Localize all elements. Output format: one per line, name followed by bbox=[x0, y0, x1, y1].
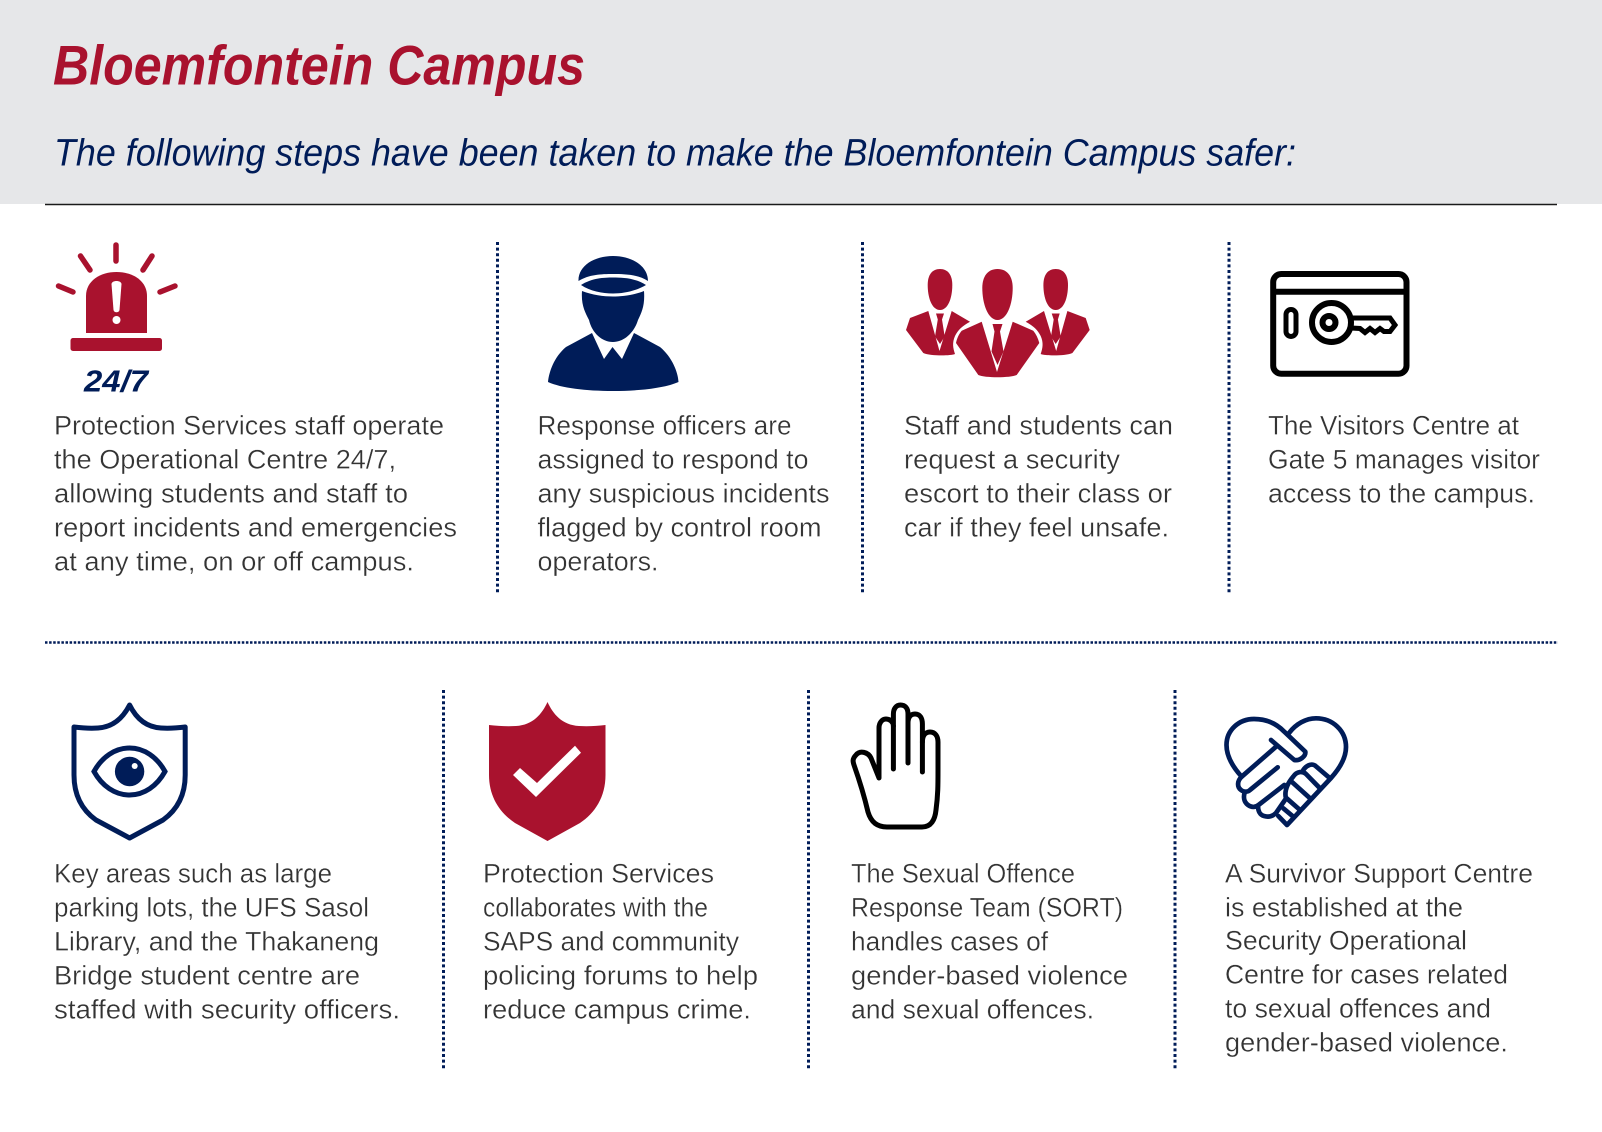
text block: visitors centre bbox=[1268, 410, 1540, 508]
text block: security escort: request a security bbox=[904, 444, 1120, 474]
text block: key areas: Key areas such as large bbox=[54, 858, 332, 888]
text block: visitors centre: access to the campus. bbox=[1268, 478, 1535, 508]
text block: SORT bbox=[851, 858, 1128, 1024]
icon: response officer bbox=[548, 256, 678, 391]
text block: response officers: assigned to respond to bbox=[538, 444, 808, 474]
text block: response officers: any suspicious incidents bbox=[538, 478, 830, 508]
text block: SORT: Response Team (SORT) bbox=[851, 892, 1123, 922]
text block: visitors centre: Gate 5 manages visitor bbox=[1268, 444, 1540, 474]
text block: SAPS collaboration: collaborates with the bbox=[483, 892, 708, 922]
text block: SORT: gender-based violence bbox=[851, 960, 1128, 990]
text block: SORT: handles cases of bbox=[851, 926, 1048, 956]
text block: operational centre: at any time, on or off campus. bbox=[54, 546, 414, 576]
text block: operational centre: allowing students and staff to bbox=[54, 478, 408, 508]
text block: response officers: flagged by control room bbox=[538, 512, 822, 542]
text block: key areas: parking lots, the UFS Sasol bbox=[54, 892, 369, 922]
text block: operational centre: the Operational Centre 24/7, bbox=[54, 444, 396, 474]
person: right bbox=[1026, 269, 1090, 355]
text block: survivor support: A Survivor Support Centre bbox=[1225, 858, 1533, 888]
text block: SORT: The Sexual Offence bbox=[851, 858, 1075, 888]
text block: response officers: Response officers are bbox=[538, 410, 792, 440]
text block: SAPS collaboration: Protection Services bbox=[483, 858, 714, 888]
text block: survivor support: is established at the bbox=[1225, 892, 1463, 922]
text block: survivor support: gender-based violence. bbox=[1225, 1028, 1508, 1058]
icon: heart with handshake bbox=[1226, 718, 1346, 825]
text block: survivor support: Centre for cases related bbox=[1225, 960, 1508, 990]
icon: shield with check bbox=[489, 702, 606, 841]
icon: key card bbox=[1273, 274, 1406, 374]
text block: response officers: operators. bbox=[538, 546, 658, 576]
text block: response officers bbox=[538, 410, 830, 576]
text block: SORT: and sexual offences. bbox=[851, 994, 1094, 1024]
subtitle: The following steps have been taken to make the Bloemfontein Campus safer: bbox=[54, 132, 1296, 174]
text block: key areas: Bridge student centre are bbox=[54, 960, 360, 990]
icon: raised hand bbox=[853, 705, 938, 827]
text block: SAPS collaboration: SAPS and community bbox=[483, 926, 739, 956]
text block: security escort: car if they feel unsafe. bbox=[904, 512, 1169, 542]
icon: alarm siren bbox=[58, 245, 175, 351]
text block: key areas: staffed with security officers. bbox=[54, 994, 400, 1024]
title: Bloemfontein Campus bbox=[53, 34, 585, 96]
text block: SAPS collaboration: reduce campus crime. bbox=[483, 994, 751, 1024]
text block: operational centre: Protection Services staff operate bbox=[54, 410, 444, 440]
label: 24/7: 24/7 bbox=[83, 364, 150, 398]
text block: key areas: Library, and the Thakaneng bbox=[54, 926, 379, 956]
text block: security escort: Staff and students can bbox=[904, 410, 1173, 440]
text block: security escort bbox=[904, 410, 1173, 542]
text block: operational centre: report incidents and emergencies bbox=[54, 512, 457, 542]
person: centre bbox=[956, 269, 1039, 377]
text block: visitors centre: The Visitors Centre at bbox=[1268, 410, 1519, 440]
text block: operational centre bbox=[54, 410, 457, 576]
text block: SAPS collaboration: policing forums to help bbox=[483, 960, 758, 990]
text block: survivor support bbox=[1225, 858, 1533, 1058]
text block: key areas bbox=[54, 858, 400, 1024]
icon: shield with eye bbox=[74, 705, 185, 838]
person: left bbox=[906, 269, 970, 355]
header band bbox=[0, 0, 1602, 204]
text block: SAPS collaboration bbox=[483, 858, 758, 1024]
text block: survivor support: Security Operational bbox=[1225, 926, 1467, 956]
text block: security escort: escort to their class or bbox=[904, 478, 1172, 508]
text block: survivor support: to sexual offences and bbox=[1225, 994, 1491, 1024]
icon: three security staff bbox=[906, 269, 1090, 377]
